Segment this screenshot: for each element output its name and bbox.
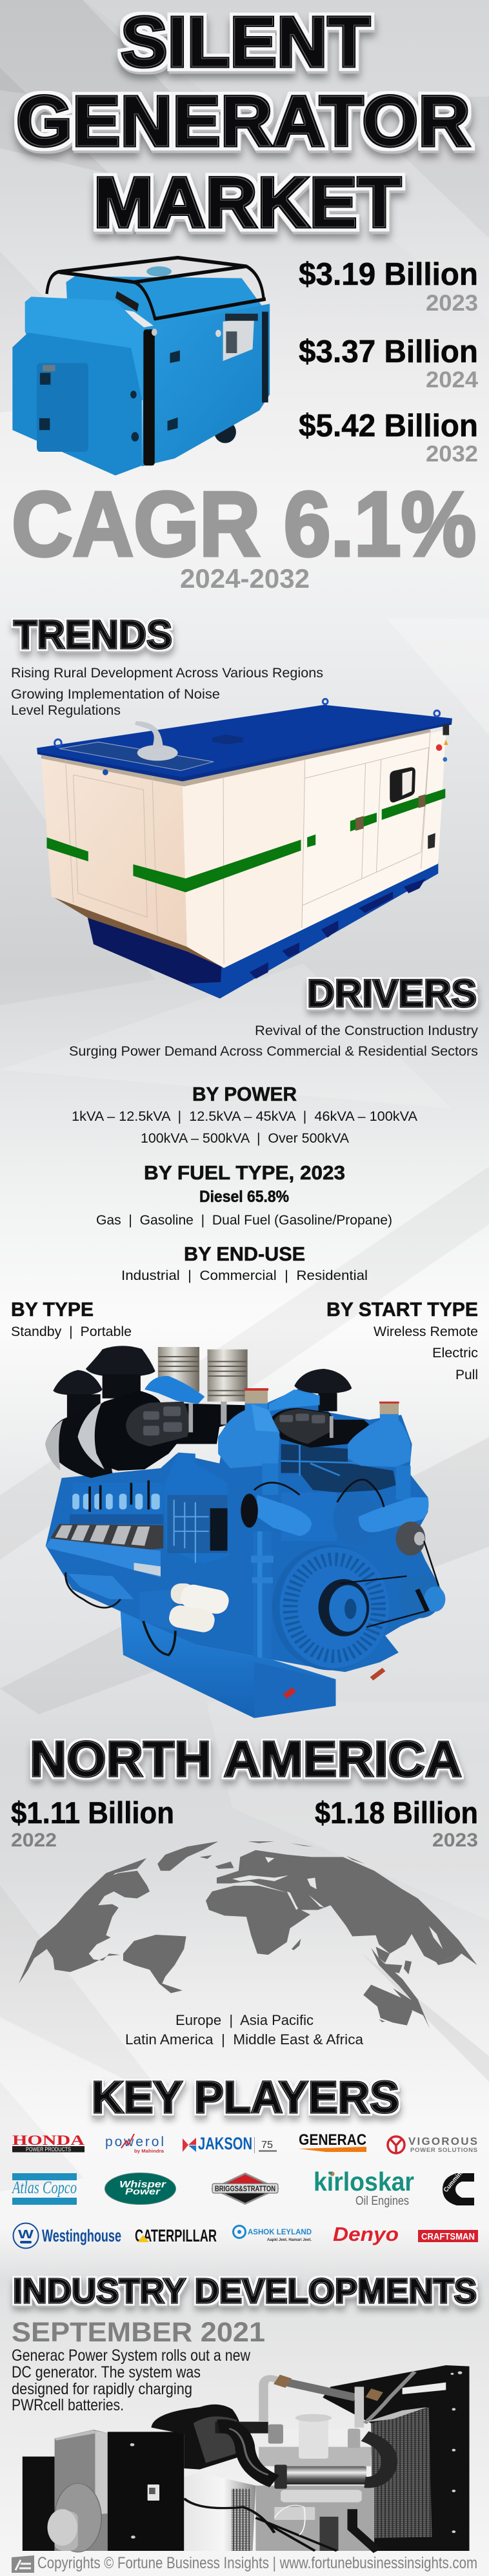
logo: Kirloskar: Oil Engines — [355, 2194, 409, 2208]
logo: Jakson: 75 — [261, 2140, 273, 2151]
development description: PWRcell batteries. — [12, 2396, 124, 2414]
heading: industry developments: INDUSTRY DEVELOPMENTS — [13, 2272, 477, 2310]
logo: Honda: HONDA — [12, 2132, 85, 2148]
logo: Cummins — [443, 2168, 474, 2205]
logo: Vigorous: VIGOROUS — [408, 2135, 477, 2147]
drivers list — [69, 1023, 478, 1059]
segment: by power: 100kVA – 500kVA | Over 500kVA — [141, 1130, 350, 1146]
world map — [12, 1841, 477, 2028]
regional value 2022: 2022 — [11, 1830, 57, 1851]
logo: Whisper Power: Power — [125, 2186, 161, 2196]
segment: by start type: Electric — [432, 1345, 478, 1361]
logo: Atlas Copco — [11, 2173, 77, 2205]
regional value 2023: $1.18 Billion — [315, 1796, 478, 1830]
regional value 2022: $1.11 Billion — [11, 1796, 174, 1830]
segment: by start type: Wireless Remote — [374, 1324, 478, 1339]
market value 2023: $3.19 Billion — [299, 257, 478, 292]
regional value 2023: 2023 — [432, 1830, 478, 1851]
market value 2023 — [299, 257, 478, 316]
segment: by fuel type — [96, 1161, 392, 1228]
logo: Vigorous — [388, 2135, 477, 2154]
segment: by type: Standby | Portable — [11, 1324, 132, 1339]
logo: Powerol: powerol — [105, 2135, 164, 2149]
logo: Honda — [12, 2132, 85, 2153]
logo: Atlas Copco: Atlas Copco — [11, 2178, 77, 2197]
drivers list: Surging Power Demand Across Commercial & Residential Sectors — [69, 1043, 478, 1059]
segment: by fuel type: BY FUEL TYPE, 2023 — [144, 1161, 345, 1184]
logo: Caterpillar — [135, 2226, 217, 2245]
logo: Vigorous: POWER SOLUTIONS — [410, 2147, 477, 2154]
heading: drivers: DRIVERS — [307, 972, 477, 1015]
illustration: cream and blue enclosed generator — [37, 699, 452, 998]
segment: by power: BY POWER — [192, 1083, 297, 1105]
illustration: blue portable silent generator — [12, 258, 270, 476]
logo: Honda: POWER PRODUCTS — [26, 2146, 71, 2153]
logo: Ashok Leyland: Aapki Jeet. Hamari Jeet. — [267, 2238, 312, 2242]
trends list: Rising Rural Development Across Various Regions — [11, 665, 323, 681]
logo: Denyo: Denyo — [333, 2223, 399, 2245]
logo: Briggs and Stratton: BRIGGS&STRATTON — [215, 2184, 275, 2193]
title: MARKET — [94, 163, 401, 242]
development date: SEPTEMBER 2021 — [12, 2317, 265, 2348]
other regions: Europe | Asia Pacific — [175, 2012, 314, 2028]
market value 2032: 2032 — [426, 441, 478, 467]
market value 2023: 2023 — [426, 291, 478, 316]
logo: Westinghouse: W — [18, 2228, 34, 2241]
drivers list: Revival of the Construction Industry — [255, 1023, 478, 1038]
segment: by start type — [326, 1298, 478, 1382]
segment: by type: BY TYPE — [11, 1298, 94, 1321]
segment: by end-use: BY END-USE — [184, 1243, 305, 1265]
trends list: Growing Implementation of Noise — [11, 686, 220, 702]
market value 2024: 2024 — [426, 367, 479, 392]
trends list — [11, 665, 323, 718]
logo: Whisper Power: Whisper — [119, 2179, 166, 2190]
illustration: monochrome diesel generator set — [23, 2365, 470, 2552]
trends list: Level Regulations — [11, 702, 121, 718]
logo: Ashok Leyland: ASHOK LEYLAND — [248, 2227, 312, 2236]
logo: Kirloskar: kirloskar — [314, 2167, 414, 2196]
segment: by end-use — [121, 1243, 368, 1283]
regional value 2022 — [11, 1796, 174, 1851]
segment: by type — [11, 1298, 132, 1339]
heading: trends: TRENDS — [14, 613, 172, 657]
CAGR callout: 2024-2032 — [180, 563, 310, 594]
segment: by start type: BY START TYPE — [326, 1298, 478, 1321]
title: SILENT — [121, 3, 370, 82]
illustration: blue diesel engine — [45, 1346, 445, 1718]
development description: DC generator. The system was — [12, 2363, 201, 2381]
logo: Kirloskar — [314, 2167, 414, 2208]
logo: Ashok Leyland — [234, 2226, 312, 2242]
segment: by power: 1kVA – 12.5kVA | 12.5kVA – 45kVA | 46kVA – 100kVA — [72, 1109, 418, 1124]
title: GENERATOR — [16, 82, 470, 161]
logo: Whisper Power — [105, 2173, 175, 2204]
segment: by end-use: Industrial | Commercial | Residential — [121, 1268, 368, 1283]
market value 2024 — [299, 334, 479, 392]
logo: Caterpillar: CATERPILLAR — [135, 2226, 217, 2245]
logo: Cummins: Cummins — [443, 2168, 466, 2194]
segment: by fuel type: Diesel 65.8% — [199, 1188, 289, 1206]
other regions: Latin America | Middle East & Africa — [125, 2031, 364, 2048]
logo: Craftsman: CRAFTSMAN — [421, 2231, 475, 2242]
segment: by power — [72, 1083, 418, 1146]
logo: Generac: GENERAC — [299, 2131, 366, 2149]
segment: by fuel type: Gas | Gasoline | Dual Fuel (Gasoline/Propane) — [96, 1212, 392, 1228]
regional value 2023 — [315, 1796, 478, 1851]
development description — [12, 2347, 251, 2414]
heading: north america: NORTH AMERICA — [30, 1730, 462, 1787]
development description: Generac Power System rolls out a new — [12, 2347, 251, 2365]
logo: Briggs and Stratton — [211, 2173, 279, 2205]
logo: Jakson: JAKSON — [198, 2134, 252, 2153]
market value 2032 — [299, 409, 478, 467]
segment: by start type: Pull — [455, 1367, 478, 1382]
logo: Westinghouse: Westinghouse — [42, 2226, 121, 2245]
development description: designed for rapidly charging — [12, 2380, 192, 2398]
logo: Westinghouse — [13, 2223, 121, 2248]
other regions — [125, 2012, 364, 2048]
logo: Powerol: by Mahindra — [134, 2148, 165, 2154]
market value 2024: $3.37 Billion — [299, 334, 478, 369]
market value 2032: $5.42 Billion — [299, 409, 478, 443]
title — [16, 3, 470, 242]
heading: key players: KEY PLAYERS — [92, 2072, 399, 2122]
